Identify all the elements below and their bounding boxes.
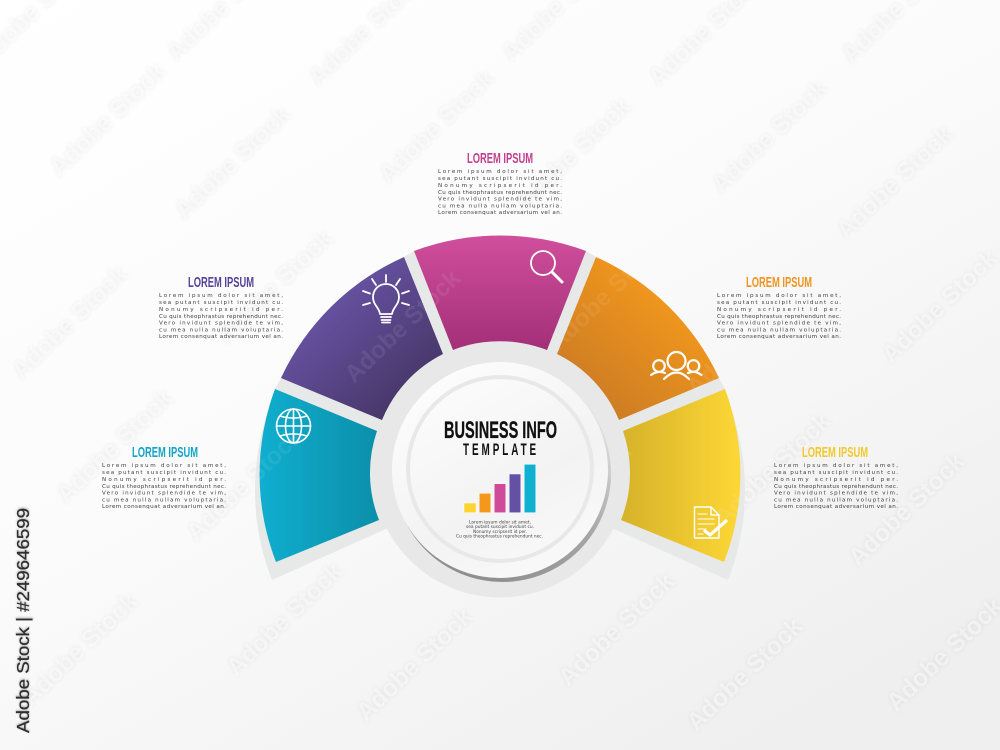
faint watermark over the graphic: Adobe Stock bbox=[710, 408, 836, 531]
faint watermark over the graphic: Adobe Stock bbox=[682, 278, 808, 401]
text block: teal: Lorem ipsum dolor sit amet, bbox=[102, 463, 226, 469]
icon: people bbox=[651, 352, 702, 379]
text block: teal: cu mea nulla nullam voluptaria. bbox=[102, 497, 226, 503]
text block: magenta: Nonumy scripserit id per. bbox=[438, 183, 562, 189]
text block: teal: LOREM IPSUM bbox=[132, 444, 198, 461]
text block: yellow: Lorem consenquat adversarium vel an. bbox=[774, 504, 898, 510]
center caption: Cu quis theophrastus reprehendunt nec. bbox=[456, 534, 543, 540]
watermark pattern: Adobe Stock bbox=[877, 245, 1000, 368]
faint watermark over the graphic: Adobe Stock bbox=[544, 233, 670, 356]
text block: yellow bbox=[774, 444, 898, 510]
text block: teal: Vero invidunt splendide te vim, bbox=[102, 490, 226, 496]
watermark pattern: Adobe Stock bbox=[17, 588, 143, 711]
text block: purple: Nonumy scripserit id per. bbox=[159, 307, 283, 313]
icon: light bulb bbox=[363, 275, 409, 322]
center hub bbox=[372, 342, 628, 598]
segment: purple bbox=[281, 257, 443, 420]
text block: yellow: LOREM IPSUM bbox=[802, 444, 868, 461]
text block: orange bbox=[717, 274, 841, 340]
text block: purple: Cu quis theophrastus reprehendunt nec. bbox=[159, 314, 283, 320]
faint watermark over the graphic: Adobe Stock bbox=[340, 265, 466, 388]
center caption bbox=[456, 520, 543, 540]
watermark pattern: Adobe Stock bbox=[222, 558, 348, 681]
watermark pattern: Adobe Stock bbox=[710, 408, 836, 531]
text block: orange: sea putant suscipit invidunt cu. bbox=[717, 300, 841, 306]
watermark pattern: Adobe Stock bbox=[182, 423, 308, 546]
text block: magenta bbox=[438, 150, 562, 216]
faint watermark over the graphic: Adobe Stock bbox=[182, 423, 308, 546]
text block: purple: Lorem ipsum dolor sit amet, bbox=[159, 293, 283, 299]
watermark pattern: Adobe Stock bbox=[707, 75, 833, 198]
watermark pattern: Adobe Stock bbox=[45, 58, 171, 181]
text block: teal: sea putant suscipit invidunt cu. bbox=[102, 470, 226, 476]
watermark pattern: Adobe Stock bbox=[682, 613, 808, 736]
text block: teal: Nonumy scripserit id per. bbox=[102, 477, 226, 483]
faint watermark over the graphic: Adobe Stock bbox=[512, 438, 638, 561]
watermark pattern: Adobe Stock bbox=[212, 225, 338, 348]
icon: globe bbox=[276, 409, 310, 443]
segment: orange bbox=[557, 257, 719, 420]
watermark pattern: Adobe Stock bbox=[52, 385, 178, 508]
faint watermark over the graphic: Adobe Stock bbox=[387, 398, 513, 521]
center caption: sea putant suscipit invidunt cu. bbox=[466, 524, 534, 530]
segment: teal bbox=[260, 389, 379, 562]
text block: yellow: Nonumy scripserit id per. bbox=[774, 477, 898, 483]
text block: orange: Nonumy scripserit id per. bbox=[717, 307, 841, 313]
text block: purple: Vero invidunt splendide te vim, bbox=[159, 320, 283, 326]
watermark pattern: Adobe Stock bbox=[374, 65, 500, 188]
text block: purple: LOREM IPSUM bbox=[188, 274, 254, 291]
text block: orange: LOREM IPSUM bbox=[746, 274, 812, 291]
text block: magenta: cu mea nulla nullam voluptaria. bbox=[438, 203, 562, 209]
text block: yellow: Vero invidunt splendide te vim, bbox=[774, 490, 898, 496]
stock id label: Adobe Stock | #249646599 bbox=[13, 508, 33, 733]
gray backing fan bbox=[255, 245, 745, 580]
text block: yellow: sea putant suscipit invidunt cu. bbox=[774, 470, 898, 476]
text block: purple: Lorem consenquat adversarium vel an. bbox=[159, 334, 283, 340]
text block: magenta: sea putant suscipit invidunt cu. bbox=[438, 176, 562, 182]
watermark pattern: Adobe Stock bbox=[832, 121, 958, 244]
text block: purple: cu mea nulla nullam voluptaria. bbox=[159, 327, 283, 333]
text block: purple bbox=[159, 274, 283, 340]
text block: orange: Lorem ipsum dolor sit amet, bbox=[717, 293, 841, 299]
center heading: BUSINESS INFO bbox=[444, 417, 557, 444]
text block: teal: Cu quis theophrastus reprehendunt nec. bbox=[102, 484, 226, 490]
watermark pattern: Adobe Stock bbox=[554, 568, 680, 691]
icon: document with check bbox=[694, 507, 726, 538]
watermark pattern: Adobe Stock bbox=[844, 448, 970, 571]
text block: yellow: cu mea nulla nullam voluptaria. bbox=[774, 497, 898, 503]
bar chart bbox=[464, 464, 536, 513]
center caption: Lorem ipsum dolor sit amet, bbox=[469, 520, 532, 526]
icon: magnifier bbox=[531, 251, 562, 282]
text block: teal bbox=[102, 444, 226, 510]
text block: orange: Vero invidunt splendide te vim, bbox=[717, 320, 841, 326]
watermark pattern: Adobe Stock bbox=[352, 603, 478, 726]
segment: magenta bbox=[414, 235, 586, 350]
text block: magenta: LOREM IPSUM bbox=[467, 150, 533, 167]
text block: yellow: Cu quis theophrastus reprehendunt nec. bbox=[774, 484, 898, 490]
center heading: TEMPLATE bbox=[463, 440, 539, 459]
faint watermark over the graphic bbox=[182, 233, 836, 561]
watermark pattern: Adobe Stock bbox=[170, 101, 296, 224]
watermark pattern: Adobe Stock bbox=[7, 261, 133, 384]
text block: purple: sea putant suscipit invidunt cu. bbox=[159, 300, 283, 306]
text block: orange: Lorem consenquat adversarium vel an. bbox=[717, 334, 841, 340]
text block: yellow: Lorem ipsum dolor sit amet, bbox=[774, 463, 898, 469]
text block: magenta: Lorem consenquat adversarium vel an. bbox=[438, 210, 562, 216]
text block: orange: cu mea nulla nullam voluptaria. bbox=[717, 327, 841, 333]
text block: orange: Cu quis theophrastus reprehendunt nec. bbox=[717, 314, 841, 320]
text block: magenta: Lorem ipsum dolor sit amet, bbox=[438, 169, 562, 175]
center caption: Nonumy scripserit id per. bbox=[473, 529, 527, 535]
center heading bbox=[444, 417, 557, 459]
watermark pattern: Adobe Stock bbox=[510, 93, 636, 216]
segment: yellow bbox=[621, 389, 740, 562]
text block: magenta: Cu quis theophrastus reprehendunt nec. bbox=[438, 190, 562, 196]
text block: magenta: Vero invidunt splendide te vim, bbox=[438, 196, 562, 202]
text block: teal: Lorem consenquat adversarium vel an. bbox=[102, 504, 226, 510]
